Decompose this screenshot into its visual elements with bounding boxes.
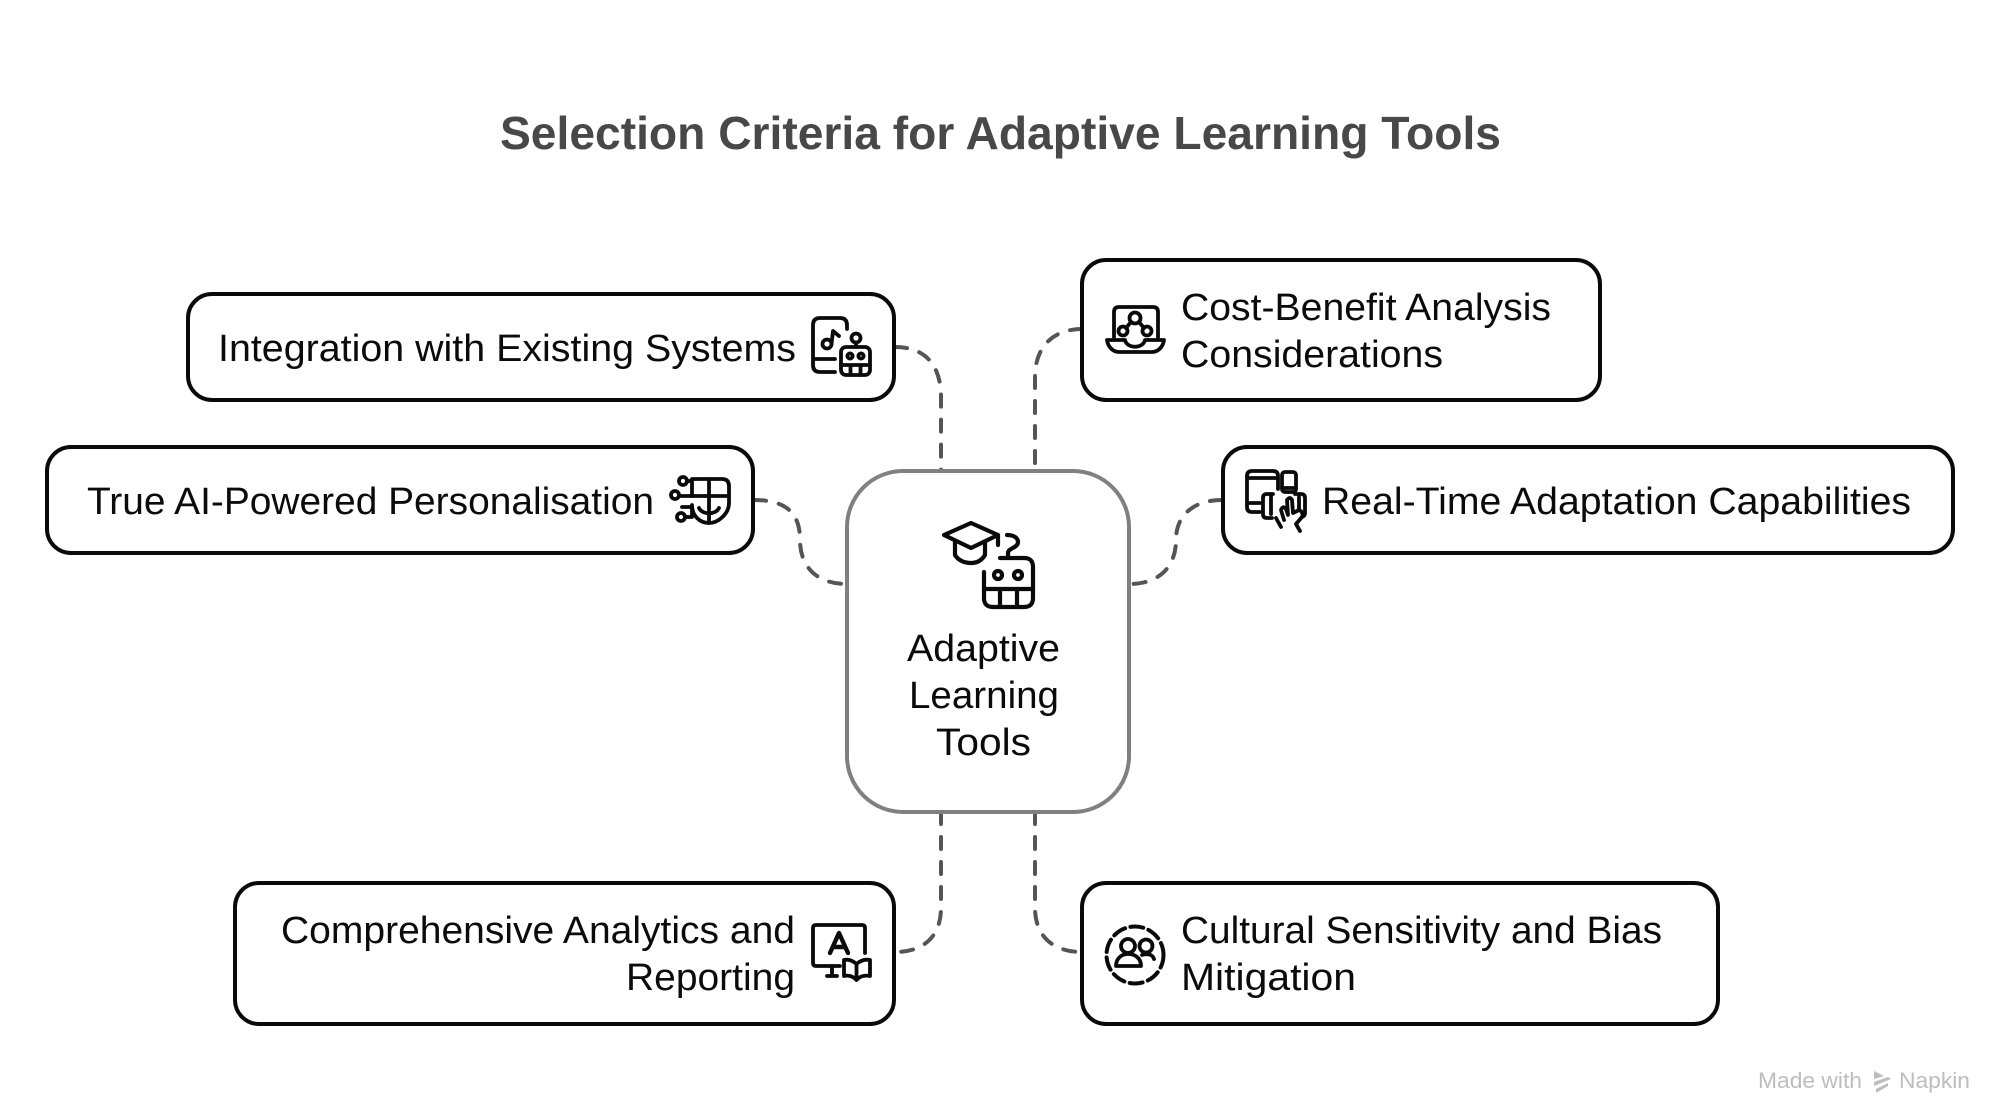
icon: tablet with music note and robot: [813, 318, 870, 375]
panel: integration with existing systems: [188, 294, 894, 400]
label: [281, 910, 795, 999]
connector: real-time to centre: [1129, 500, 1222, 584]
label: True AI-Powered Personalisation: [87, 481, 654, 523]
panel: comprehensive analytics and reporting: [235, 883, 894, 1024]
label: Mitigation: [1181, 957, 1356, 999]
label: Comprehensive Analytics and: [281, 910, 795, 952]
label: Considerations: [1181, 334, 1443, 376]
connector: cultural sensitivity to centre: [1035, 812, 1082, 952]
label: Reporting: [626, 957, 795, 999]
panel: true AI-powered personalisation: [47, 447, 753, 553]
icon: devices and hand: [1247, 471, 1305, 531]
icon: people in dashed circle: [1106, 926, 1164, 984]
watermark: made with napkin: Made with: [1758, 1068, 1862, 1093]
label: Real-Time Adaptation Capabilities: [1322, 481, 1911, 523]
icon: laptop with network: [1107, 307, 1164, 352]
watermark: made with napkin: [1758, 1068, 1970, 1093]
centre label: [907, 628, 1060, 764]
label: [1181, 910, 1662, 999]
label: Cost-Benefit Analysis: [1181, 287, 1551, 329]
label: [1181, 287, 1551, 376]
panel: cultural sensitivity and bias mitigation: [1082, 883, 1718, 1024]
connector: integration to centre: [895, 347, 941, 471]
panel: centre node: [847, 471, 1129, 812]
label: Integration with Existing Systems: [218, 328, 796, 370]
icon: graduation cap and robot: [944, 523, 1033, 607]
centre label: Tools: [936, 722, 1031, 764]
title: Selection Criteria for Adaptive Learning Tools: [500, 107, 1501, 159]
centre label: Adaptive: [907, 628, 1060, 670]
panel: real-time adaptation capabilities: [1223, 447, 1953, 553]
connector: cost-benefit to centre: [1035, 329, 1082, 471]
icon: monitor with letter and book: [813, 925, 870, 980]
centre label: Learning: [909, 675, 1059, 717]
label: Cultural Sensitivity and Bias: [1181, 910, 1662, 952]
panel: cost-benefit analysis: [1082, 260, 1600, 400]
icon: circuit mask: [671, 477, 729, 523]
connector: personalisation to centre: [754, 500, 847, 584]
watermark: made with napkin: Napkin: [1899, 1068, 1970, 1093]
icon: napkin logo: [1874, 1071, 1891, 1093]
connector: analytics to centre: [895, 812, 941, 952]
